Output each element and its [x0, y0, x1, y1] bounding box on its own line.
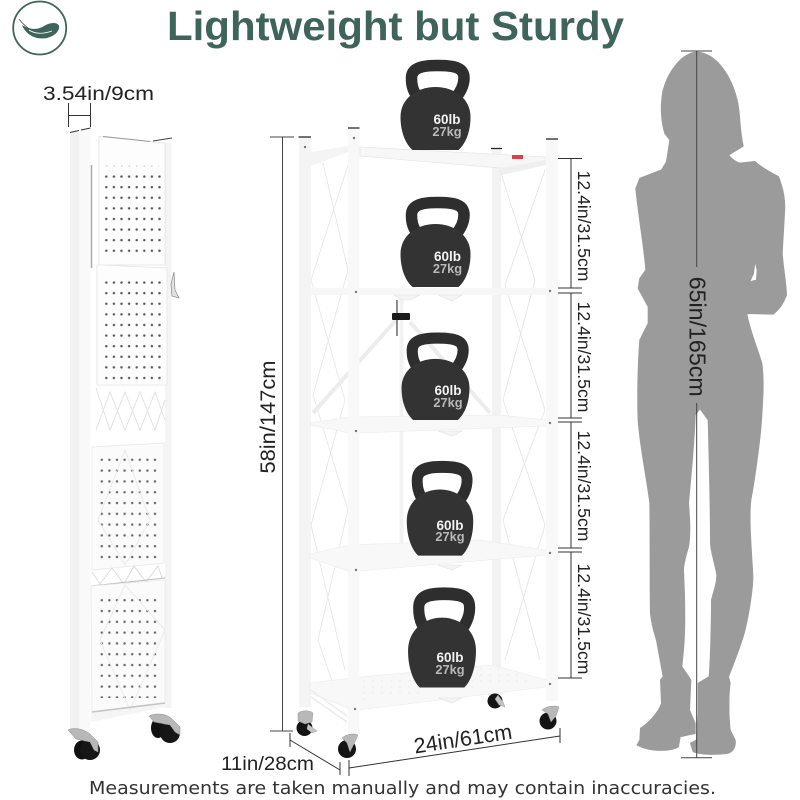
silhouette: human figure: [636, 52, 786, 754]
kettlebell 4: 27kg: [435, 529, 465, 544]
dimension: shelf spacing 2: [558, 293, 594, 418]
shelf 1: [311, 146, 546, 175]
caster: front left: [338, 734, 358, 758]
folding brace: [313, 300, 490, 413]
dimension: human height: [681, 51, 712, 758]
kettlebell 4: 60lb: [436, 518, 464, 533]
dimension: shelf spacing 3: [558, 422, 594, 548]
dimension: depth: 11in/28cm: [221, 754, 314, 775]
lattice section: [96, 388, 165, 430]
dimension: overall rack height: 58in/147cm: [256, 360, 280, 474]
folded panel: bottom: [91, 580, 165, 712]
folded rack frame: [70, 128, 172, 732]
caster: front right: [540, 706, 559, 730]
dimension: width: 24in/61cm: [412, 720, 514, 758]
shelf 2: [310, 288, 546, 301]
kettlebell 1: 27kg: [432, 124, 462, 139]
icon: feather logo: [13, 2, 66, 54]
footnote: Measurements are taken manually and may contain inaccuracies.: [89, 778, 716, 799]
shelf 3: [310, 415, 546, 436]
open rack: [296, 128, 559, 758]
handle clip: [171, 272, 179, 298]
dimension: folded width: [43, 83, 154, 127]
caster: folded rack front: [68, 729, 100, 760]
title: Lightweight but Sturdy: [167, 3, 624, 49]
kettlebell 5: [408, 594, 476, 688]
kettlebell 2: 60lb: [434, 249, 461, 264]
kettlebell 5: 60lb: [436, 650, 464, 665]
kettlebell 5: 27kg: [435, 662, 465, 677]
kettlebell 3: 27kg: [433, 395, 463, 410]
kettlebell 1: 60lb: [433, 112, 461, 127]
caster: rear left: [296, 711, 317, 736]
kettlebell 2: [400, 202, 470, 287]
kettlebell 3: [402, 338, 469, 420]
front posts: [298, 128, 558, 734]
dimension: shelf spacing 2: 12.4in/31.5cm: [574, 302, 594, 412]
dimension: shelf spacing 4: [558, 552, 594, 678]
dimension: depth: [221, 733, 340, 775]
dimension: shelf spacing 3: 12.4in/31.5cm: [574, 430, 594, 542]
kettlebell 4: [407, 467, 473, 556]
dimension: width: [349, 720, 560, 776]
folded rack: side view: [68, 128, 180, 760]
caster: rear right: [488, 694, 505, 708]
caster: folded rack rear: [149, 714, 180, 743]
kettlebell 1: [400, 66, 470, 150]
dimension: shelf spacing 4: 12.4in/31.5cm: [574, 564, 594, 674]
folded panel: top: [99, 136, 165, 265]
dimension: overall rack height: [256, 137, 294, 731]
folded panel: third: [92, 443, 164, 570]
kettlebell 3: 60lb: [434, 383, 462, 398]
folded panel: second: [97, 265, 167, 385]
shelf 5: [310, 665, 546, 722]
dimension: shelf spacing 1: 12.4in/31.5cm: [574, 170, 594, 282]
back posts and lattice: [299, 137, 545, 707]
dimension: human height: 65in/165cm: [684, 277, 710, 397]
dimension: shelf spacing 1: [558, 158, 594, 288]
dimension: folded width: 3.54in/9cm: [43, 83, 154, 105]
lattice section lower: [92, 566, 162, 584]
kettlebell 2: 27kg: [433, 261, 462, 276]
shelf 4: [310, 540, 546, 571]
